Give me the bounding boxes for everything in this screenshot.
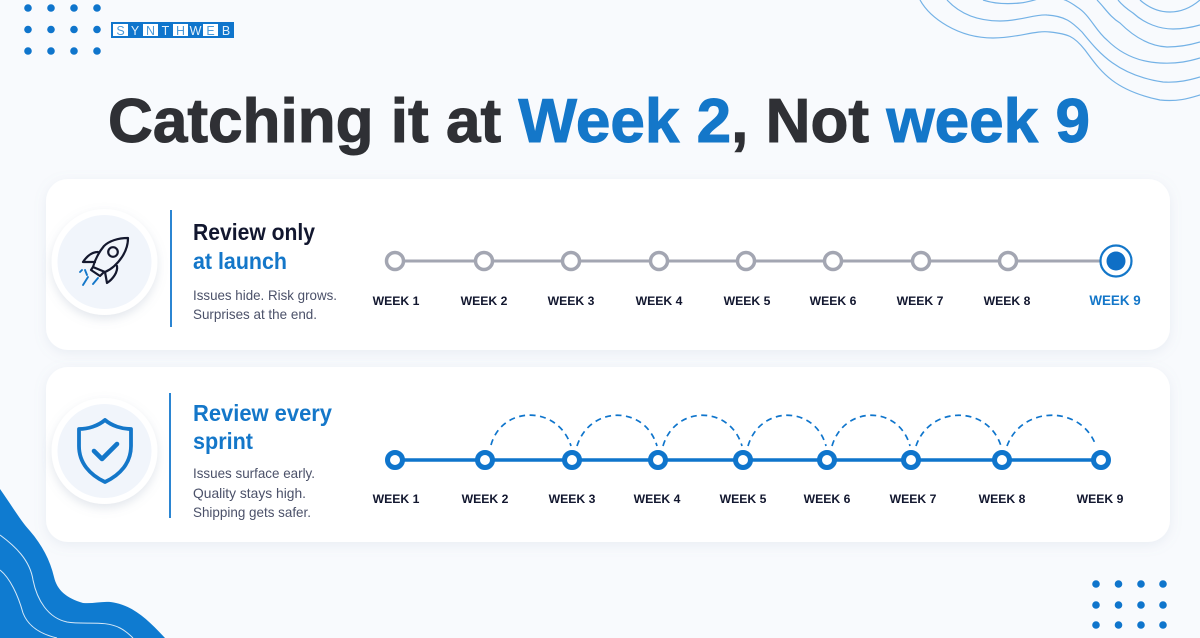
- heading: review every sprint: Review every: [193, 400, 332, 426]
- heading: review only at launch: Review only: [193, 219, 315, 245]
- heading: review only at launch: at launch: [193, 248, 287, 274]
- icon: shield: [52, 398, 158, 504]
- timeline: every sprint: WEEK 3: [549, 492, 596, 506]
- timeline: week 9 only: WEEK 4: [636, 294, 683, 308]
- divider: [170, 210, 172, 327]
- timeline: every sprint: WEEK 2: [462, 492, 509, 506]
- decoration: top right wave lines: [920, 0, 1200, 101]
- description: Surprises at the end.: [193, 307, 317, 322]
- logo: SYNTHWEB: S: [116, 24, 125, 38]
- logo: SYNTHWEB: B: [222, 24, 230, 38]
- timeline: week 9 only: WEEK 9: [1089, 293, 1141, 308]
- logo: SYNTHWEB: N: [146, 24, 155, 38]
- title: Catching it at Week 2, Not week 9: [108, 87, 1090, 156]
- timeline: every sprint: WEEK 7: [890, 492, 937, 506]
- timeline: every sprint: WEEK 6: [804, 492, 851, 506]
- timeline: every sprint: WEEK 4: [634, 492, 681, 506]
- timeline: week 9 only: WEEK 2: [461, 294, 508, 308]
- divider: [169, 393, 171, 518]
- logo: SYNTHWEB: W: [190, 24, 202, 38]
- timeline: every sprint: [373, 415, 1124, 506]
- timeline: every sprint: WEEK 5: [720, 492, 767, 506]
- logo: SYNTHWEB: T: [162, 24, 170, 38]
- timeline: week 9 only: WEEK 7: [897, 294, 944, 308]
- logo: SYNTHWEB: [111, 22, 234, 38]
- timeline: every sprint: WEEK 1: [373, 492, 420, 506]
- logo: SYNTHWEB: E: [206, 24, 215, 38]
- heading: review every sprint: [193, 400, 332, 454]
- description: Shipping gets safer.: [193, 505, 311, 520]
- timeline: week 9 only: WEEK 6: [810, 294, 857, 308]
- timeline: week 9 only: WEEK 3: [548, 294, 595, 308]
- decoration: top left dot grid: [24, 4, 101, 55]
- timeline: every sprint: WEEK 9: [1077, 492, 1124, 506]
- description: Issues hide. Risk grows.: [193, 288, 337, 303]
- timeline: week 9 only: [373, 246, 1141, 308]
- timeline: week 9 only: WEEK 5: [724, 294, 771, 308]
- timeline: every sprint: WEEK 8: [979, 492, 1026, 506]
- logo: SYNTHWEB: H: [176, 24, 185, 38]
- decoration: bottom right dot grid: [1092, 580, 1167, 629]
- panel: review every sprint: [46, 367, 1170, 542]
- icon: rocket: [52, 209, 158, 315]
- description: [193, 466, 315, 520]
- description: [193, 288, 337, 322]
- timeline: week 9 only: WEEK 1: [373, 294, 420, 308]
- description: Quality stays high.: [193, 486, 306, 501]
- timeline: week 9 only: WEEK 8: [984, 294, 1031, 308]
- decoration: bottom left blue wave: [0, 489, 165, 638]
- logo: SYNTHWEB: Y: [131, 24, 140, 38]
- heading: review every sprint: sprint: [193, 428, 253, 454]
- heading: review only at launch: [193, 219, 315, 274]
- description: Issues surface early.: [193, 466, 315, 481]
- panel: review only at launch: [46, 179, 1170, 350]
- dashed arcs: [491, 415, 1096, 446]
